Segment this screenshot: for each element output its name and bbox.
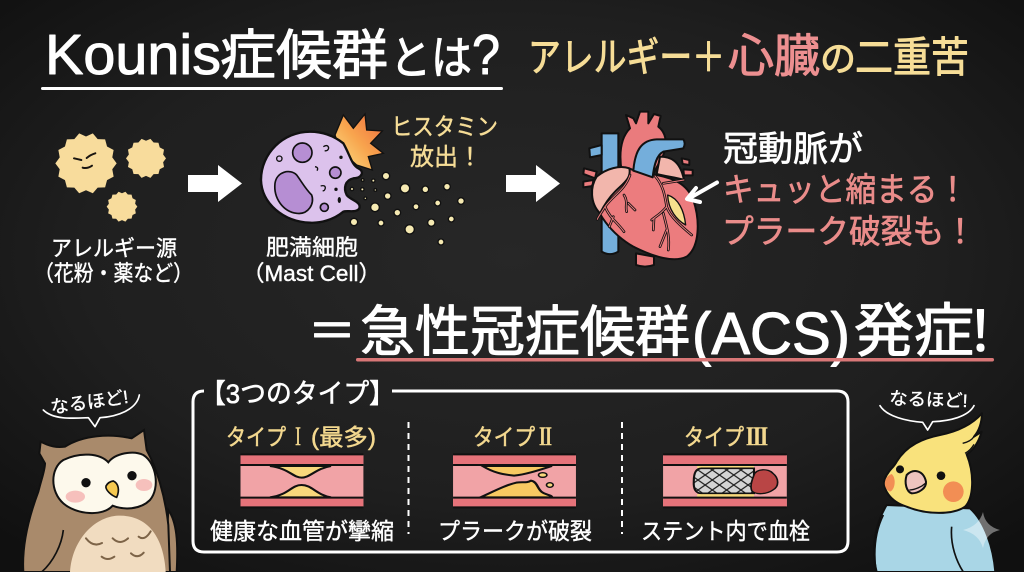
arrow: points to coronary — [687, 182, 717, 202]
diagram: type I vasospasm — [241, 454, 363, 507]
panel heading: 【3つのタイプ】 — [200, 379, 395, 409]
icon: allergen pollen — [55, 133, 166, 222]
icon: heart — [583, 112, 698, 267]
histamine label: 放出！ — [410, 144, 482, 171]
diagram: type II plaque rupture — [453, 454, 576, 507]
cockatiel head and crest — [884, 413, 982, 513]
type labels: Ⅲ — [746, 419, 768, 452]
histamine label: ヒスタミン — [391, 114, 498, 141]
histamine label — [391, 114, 498, 171]
mast cell label: （Mast Cell） — [242, 261, 381, 286]
type captions: 健康な血管が攣縮 — [210, 518, 394, 544]
conclusion: ACS onset: ＝ — [308, 306, 356, 359]
type labels: Ⅰ — [292, 419, 304, 452]
histamine particles — [350, 172, 464, 245]
coronary text: 冠動脈が — [723, 130, 863, 169]
mast cell label — [242, 235, 381, 286]
coronary text: キュッと縮まる！ — [723, 171, 968, 208]
type labels: タイプ — [226, 424, 286, 450]
coronary text — [722, 130, 976, 250]
subtitle: 二重苦 — [855, 34, 969, 81]
allergen label — [34, 236, 193, 286]
owl speech bubble: なるほど! — [49, 387, 130, 418]
arrow: mast cell to heart — [506, 165, 560, 202]
subtitle — [528, 30, 969, 82]
type labels: (最多) — [311, 424, 376, 450]
type labels: Ⅱ — [537, 419, 554, 452]
cockatiel speech bubble — [880, 388, 974, 430]
diagram: type III stent thrombosis — [663, 454, 787, 507]
icon: histamine burst — [335, 114, 383, 170]
title: Kounis — [45, 23, 221, 87]
conclusion: ACS onset: 発症 — [854, 299, 974, 364]
character: cockatiel — [874, 388, 995, 572]
subtitle: 心臓 — [728, 30, 820, 82]
conclusion: ACS onset: (ACS) — [692, 301, 850, 367]
mast cell label: 肥満細胞 — [266, 235, 358, 260]
type labels — [226, 419, 768, 452]
type captions: プラークが破裂 — [438, 518, 592, 544]
title: とは — [390, 32, 472, 84]
type captions — [210, 518, 810, 544]
owl body — [165, 510, 177, 572]
owl speech bubble — [43, 387, 139, 427]
conclusion: ACS onset: ！ — [953, 301, 1008, 363]
title: 症候群 — [220, 26, 388, 86]
arrow: allergen to mast cell — [188, 165, 242, 202]
allergen label: アレルギー源 — [51, 236, 177, 261]
subtitle: アレルギー＋ — [528, 36, 725, 80]
character: owl — [23, 387, 177, 572]
cockatiel body — [874, 505, 995, 572]
conclusion: ACS onset — [308, 299, 1008, 367]
allergen label: （花粉・薬など） — [34, 261, 193, 286]
cockatiel speech bubble: なるほど! — [889, 388, 968, 411]
decorative sparkle — [963, 512, 1000, 548]
icon: mast cell — [261, 132, 362, 223]
coronary text: プラーク破裂も！ — [722, 213, 976, 250]
type captions: ステント内で血栓 — [641, 518, 810, 544]
subtitle: の — [820, 38, 856, 79]
conclusion: ACS onset: 急性冠症候群 — [360, 301, 690, 363]
type labels: タイプ — [473, 424, 535, 450]
panel: three types — [193, 379, 848, 552]
title — [41, 23, 503, 90]
dashed dividers — [408, 422, 622, 534]
title: ? — [472, 23, 500, 87]
type labels: タイプ — [684, 424, 744, 450]
